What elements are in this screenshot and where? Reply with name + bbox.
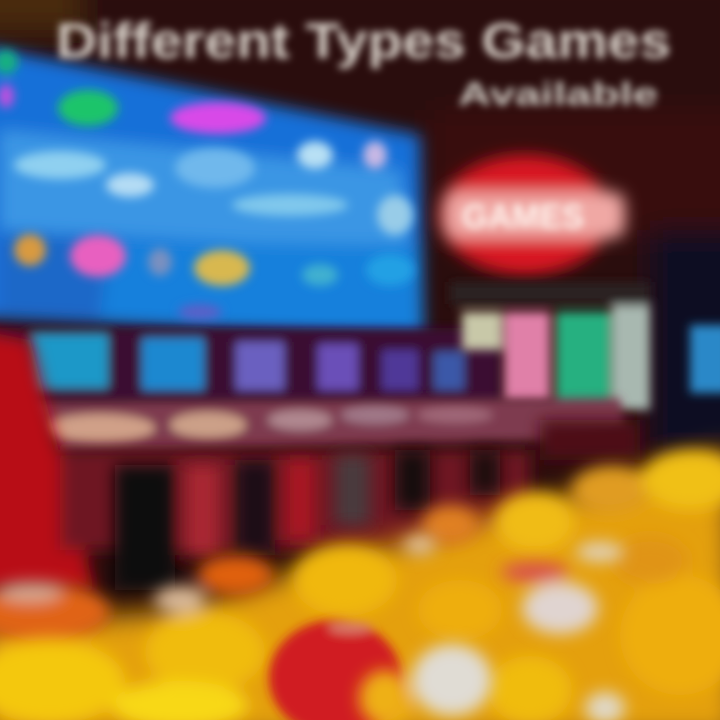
title: Different Types Games (56, 13, 671, 69)
yellow ball pile (0, 450, 720, 720)
lower monitor row (0, 328, 500, 403)
desk (28, 398, 625, 452)
red sign (439, 155, 625, 275)
large blue game screen (0, 45, 424, 340)
right-side arcade screens (450, 282, 720, 414)
sign label: GAMES (462, 198, 584, 236)
red ball (269, 620, 401, 720)
cabinet legs (115, 450, 500, 590)
title (56, 13, 671, 112)
subtitle: Available (458, 76, 658, 112)
red cabinet base (0, 330, 640, 590)
screen tiles (0, 50, 414, 320)
balls (0, 450, 720, 720)
white and pink balls (359, 535, 625, 720)
